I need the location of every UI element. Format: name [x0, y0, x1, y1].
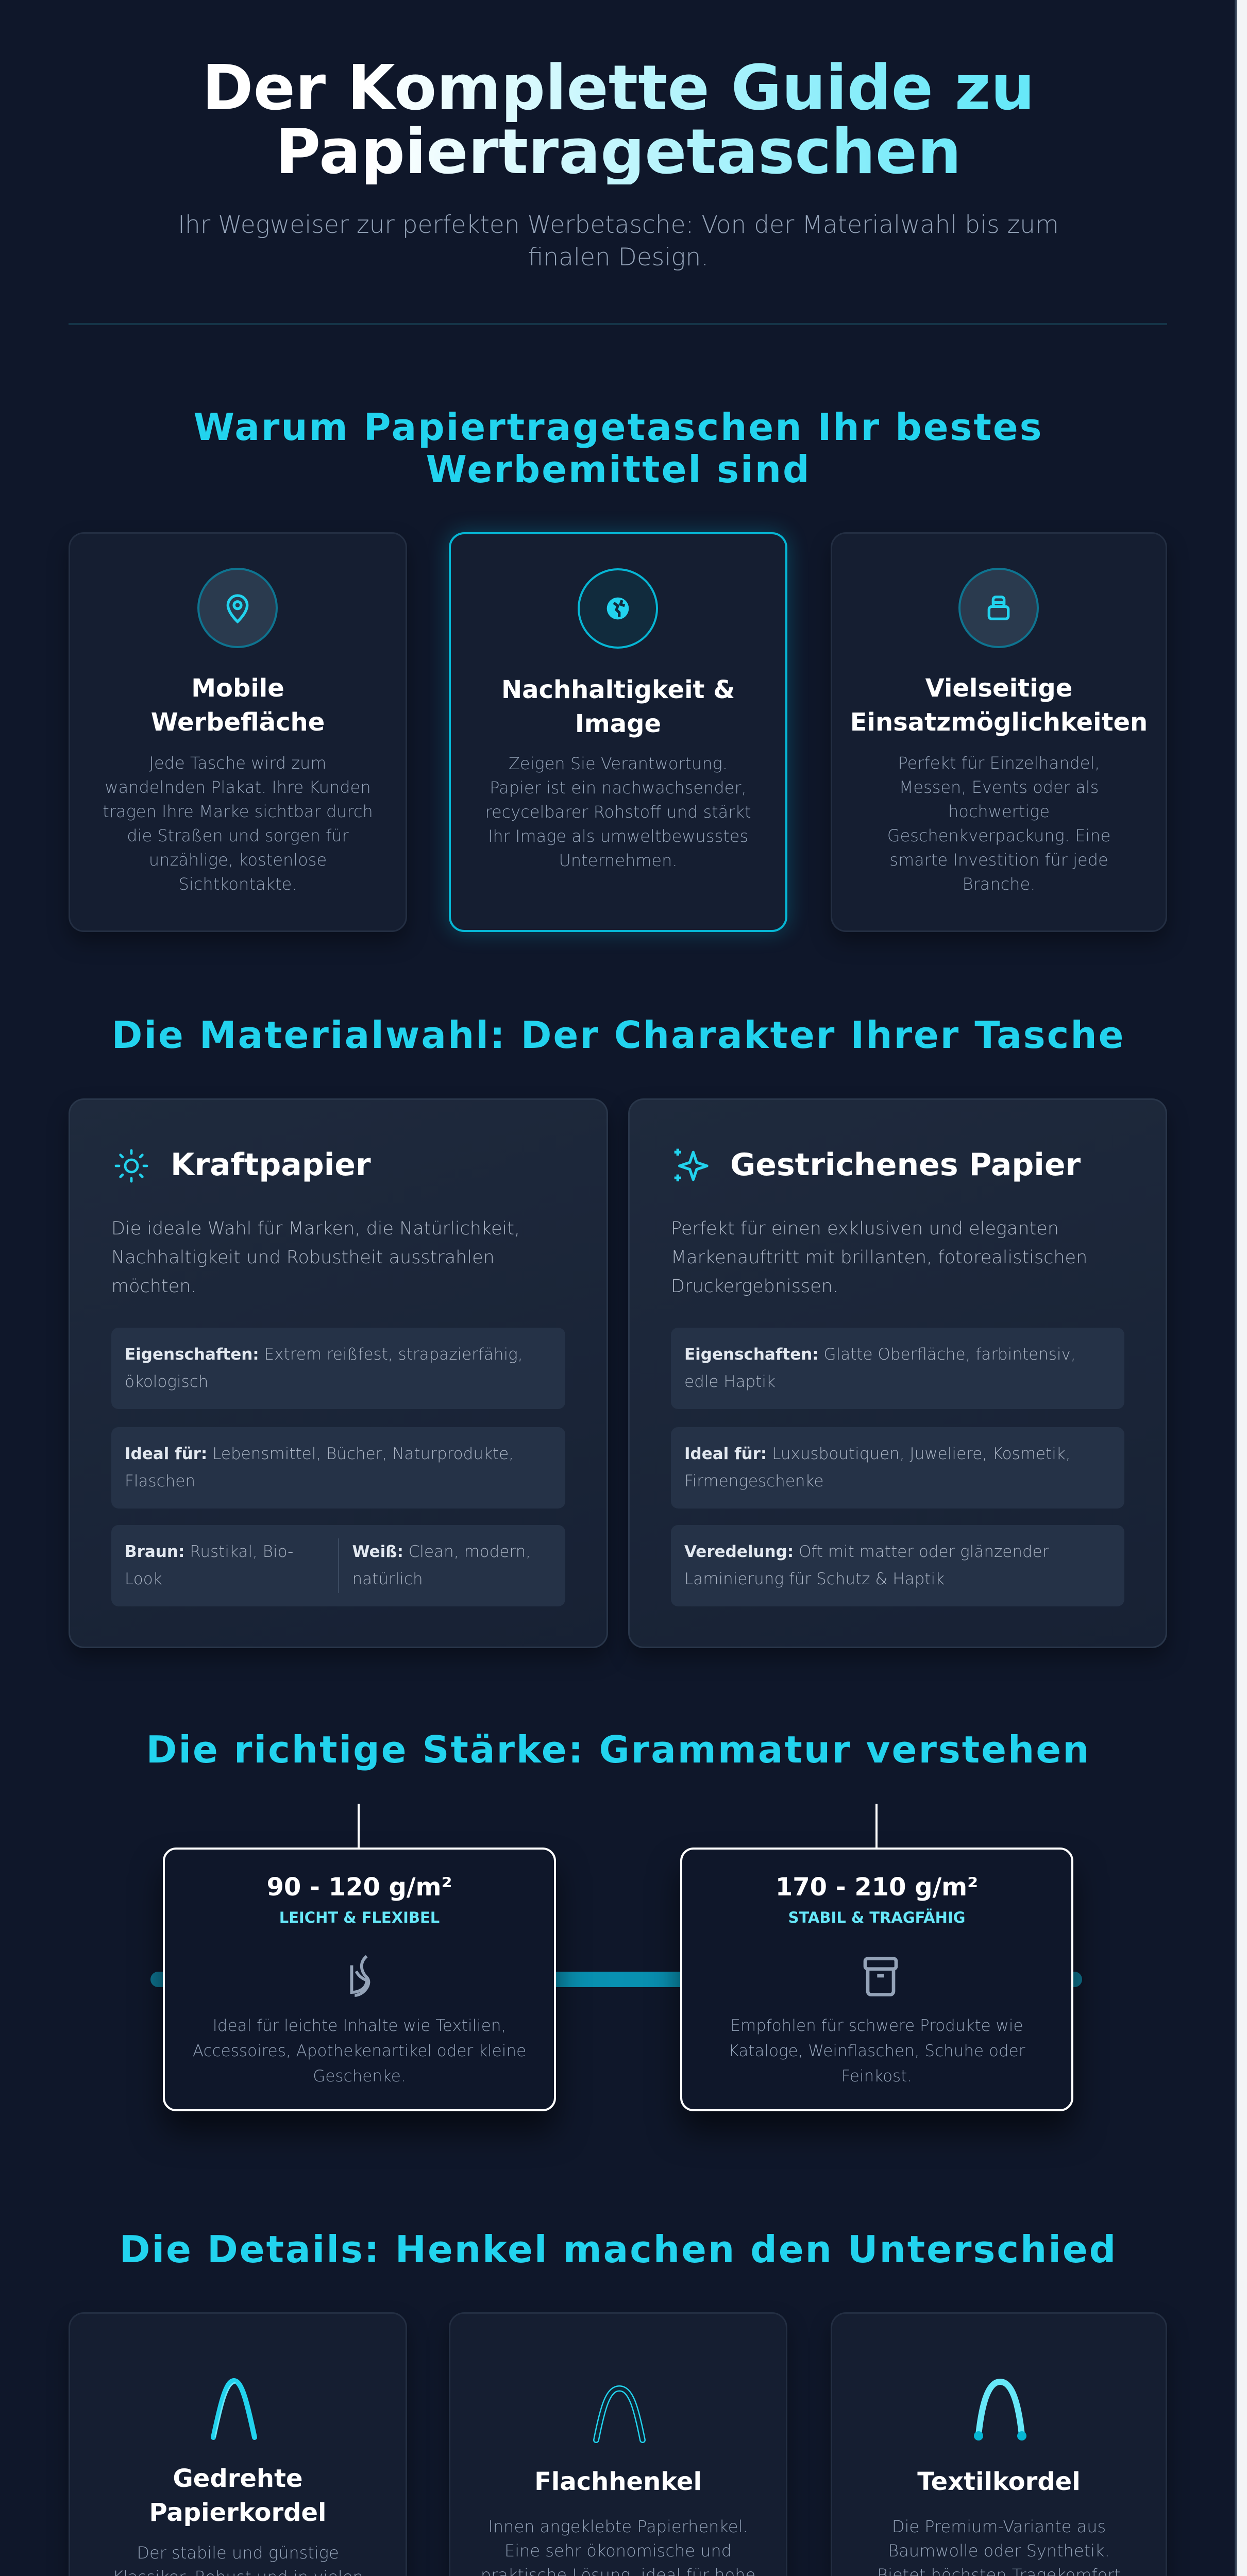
heading: henkel: Die Details: Henkel machen den Unterschied	[120, 2228, 1117, 2271]
card: mobile werbefläche	[69, 532, 407, 932]
panel: gestrichenes papier: Perfekt für einen exklusiven und eleganten Markenauftritt mit brillanten, fotorealistischen Druckergebnissen.	[671, 1218, 1087, 1297]
panel: gestrichenes papier	[628, 1098, 1167, 1648]
card: 170-210: STABIL & TRAGFÄHIG	[788, 1909, 965, 1926]
panel: kraftpapier: Weiß: Clean, modern, natürlich	[352, 1543, 531, 1588]
icon: sun	[114, 1149, 148, 1183]
card: mobile werbefläche: Mobile	[191, 674, 284, 703]
panel: kraftpapier	[69, 1098, 608, 1648]
card: vielseitig	[831, 532, 1167, 932]
icon: cord handle	[974, 2379, 1026, 2441]
title: Der Komplette Guide zu	[202, 53, 1035, 124]
card: gedrehte papierkordel: Papierkordel	[149, 2498, 326, 2527]
icon: archive box	[864, 1957, 898, 1996]
icon: package	[958, 568, 1039, 648]
panel: kraftpapier: Eigenschaften: Extrem reißfest, strapazierfähig, ökologisch	[125, 1345, 523, 1391]
card: 170-210: 170 - 210 g/m²	[776, 1873, 978, 1902]
card: 170-210	[680, 1848, 1073, 2111]
title: Papiertragetaschen	[275, 116, 962, 188]
card: nachhaltigkeit: Nachhaltigkeit &	[501, 675, 735, 704]
title	[0, 57, 1237, 184]
card: 90-120: Ideal für leichte Inhalte wie Textilien, Accessoires, Apothekenartikel oder kleine Geschenke.	[193, 2016, 526, 2086]
card: nachhaltigkeit: Image	[575, 709, 661, 738]
panel: gestrichenes papier: Ideal für: Luxusboutiquen, Juweliere, Kosmetik, Firmengeschenke	[684, 1445, 1071, 1490]
subtitle: Ihr Wegweiser zur perfekten Werbetasche: Von der Materialwahl bis zum finalen Design.	[178, 211, 1059, 272]
panel: gestrichenes papier: Gestrichenes Papier	[730, 1147, 1081, 1183]
card: 90-120	[163, 1848, 556, 2111]
card: 90-120: LEICHT & FLEXIBEL	[279, 1909, 440, 1926]
icon: globe	[578, 568, 658, 649]
card: nachhaltigkeit: Zeigen Sie Verantwortung. Papier ist ein nachwachsender, recycelbarer Rohstoff und stärkt Ihr Image als umweltbewusstes Unternehmen.	[485, 754, 751, 870]
card: flachhenkel	[449, 2312, 787, 2576]
heading: materialwahl: Die Materialwahl: Der Charakter Ihrer Tasche	[112, 1013, 1125, 1057]
card: flachhenkel: Flachhenkel	[534, 2467, 702, 2496]
panel: kraftpapier: Kraftpapier	[171, 1147, 371, 1183]
card: textilkordel: Textilkordel	[917, 2467, 1081, 2496]
icon: sparkles	[674, 1149, 709, 1181]
card: mobile werbefläche: Werbefläche	[151, 708, 325, 737]
card: vielseitig: Perfekt für Einzelhandel, Messen, Events oder als hochwertige Geschenkverpackung. Eine smarte Investition für jede Branche.	[887, 753, 1110, 894]
timeline bar	[150, 1972, 1082, 1987]
card: mobile werbefläche: Jede Tasche wird zum wandelnden Plakat. Ihre Kunden tragen Ihre Marke sichtbar durch die Straßen und sorgen für unzählige, kostenlose Sichtkontakte.	[103, 753, 373, 894]
panel: kraftpapier: Braun: Rustikal, Bio-Look	[125, 1543, 293, 1588]
icon: flat handle	[593, 2385, 646, 2443]
panel: kraftpapier: Ideal für: Lebensmittel, Bücher, Naturprodukte, Flaschen	[125, 1445, 514, 1490]
panel: kraftpapier: Die ideale Wahl für Marken, die Natürlichkeit, Nachhaltigkeit und Robustheit ausstrahlen möchten.	[111, 1218, 520, 1297]
card: gedrehte papierkordel: Gedrehte	[173, 2464, 303, 2493]
heading: warum: Warum Papiertragetaschen Ihr bestes	[193, 405, 1043, 449]
card: textilkordel	[831, 2312, 1167, 2576]
heading: warum: Werbemittel sind	[426, 448, 811, 491]
icon: feather	[350, 1955, 370, 1997]
card: 90-120: 90 - 120 g/m²	[267, 1873, 452, 1902]
heading: warum	[193, 405, 1043, 491]
icon: twisted handle	[211, 2378, 257, 2440]
heading: grammatur: Die richtige Stärke: Grammatur verstehen	[146, 1728, 1090, 1771]
card: 170-210: Empfohlen für schwere Produkte wie Kataloge, Weinflaschen, Schuhe oder Feinkost.	[729, 2016, 1025, 2086]
panel: gestrichenes papier: Eigenschaften: Glatte Oberfläche, farbintensiv, edle Haptik	[684, 1345, 1076, 1391]
icon: location pin	[197, 568, 278, 648]
card: vielseitig: Vielseitige	[925, 674, 1072, 703]
card: vielseitig: Einsatzmöglichkeiten	[850, 708, 1148, 737]
card: gedrehte papierkordel	[69, 2312, 407, 2576]
panel: gestrichenes papier: Veredelung: Oft mit matter oder glänzender Laminierung für Schutz & Haptik	[684, 1543, 1049, 1588]
card: nachhaltigkeit	[449, 532, 787, 932]
